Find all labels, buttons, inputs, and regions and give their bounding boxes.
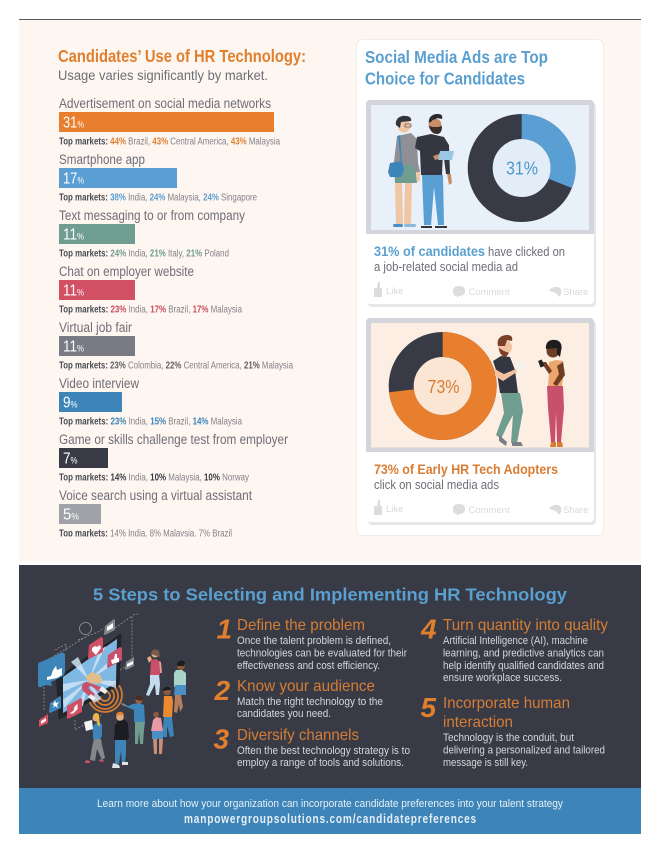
step 5: incorporate human interaction: interaction <box>443 714 513 731</box>
social actions row: Comment <box>468 505 510 516</box>
step 4: turn quantity into quality: learning, and predictive analytics can <box>443 648 604 660</box>
step 5: incorporate human interaction: Incorporate human <box>443 695 570 712</box>
icon: like bubble <box>38 653 65 687</box>
step 2: know your audience: candidates you need. <box>237 708 331 720</box>
person: woman in pink <box>151 712 163 754</box>
step 4: turn quantity into quality: Artificial Intelligence (AI), machine <box>443 635 588 647</box>
bar row: smartphone app: Top markets: 38% India, 24% Malaysia, 24% Singapore <box>59 192 257 204</box>
caption: 31% of candidates: have clicked on <box>488 245 565 259</box>
bar row: chat: 11% <box>63 282 84 300</box>
bar row: voice search: Voice search using a virtual assistant <box>59 488 252 503</box>
icon: tablet with rays <box>56 633 122 720</box>
bar row: chat: Top markets: 23% India, 17% Brazil, 17% Malaysia <box>59 304 242 316</box>
panel: candidates' use of HR technology <box>19 20 641 562</box>
step 2: know your audience: Match the right technology to the <box>237 696 383 708</box>
bar row: social media: Advertisement on social media networks <box>59 96 271 111</box>
bar row: virtual job fair: Virtual job fair <box>59 320 132 335</box>
bar row: chat <box>59 264 242 316</box>
bar row: game or skills challenge: Game or skills challenge test from employer <box>59 432 288 447</box>
icon: hand holding magnet <box>82 672 108 701</box>
step 5: incorporate human interaction <box>420 692 605 769</box>
bar row: voice search <box>59 488 252 540</box>
bar row: social media <box>59 96 280 148</box>
step 4: turn quantity into quality <box>420 614 608 684</box>
icon: pink thumb card <box>67 698 82 719</box>
step 4: turn quantity into quality: ensure workplace success. <box>443 672 562 684</box>
person: man in black <box>112 712 129 768</box>
step 3: diversify channels: employ a range of tools and solutions. <box>237 757 404 769</box>
step 2: know your audience: Know your audience <box>237 678 375 695</box>
illustration: two people with phones <box>493 335 565 447</box>
bar row: video interview <box>59 376 242 428</box>
social actions row: Like <box>386 286 403 297</box>
donut chart: 73%: 73% <box>428 376 460 397</box>
illustration: people around tablet with magnet <box>38 614 186 768</box>
step 3: diversify channels: 3 <box>214 724 230 754</box>
bar row: voice search: Top markets: 14% India, 8% Malaysia, 7% Brazil <box>59 528 232 540</box>
subheading: Usage varies significantly by market. <box>58 68 268 83</box>
bar row: social media: Top markets: 44% Brazil, 43% Central America, 43% Malaysia <box>59 136 280 148</box>
icon: star card <box>49 696 61 713</box>
icon: thumb card <box>107 647 122 668</box>
step 1: define the problem: technologies can be evaluated for their <box>237 648 407 660</box>
bar row: voice search: 5% <box>63 506 79 524</box>
social actions row: Like <box>386 504 403 515</box>
step 5: incorporate human interaction: Technology is the conduit, but <box>443 732 574 744</box>
bar row: chat: Chat on employer website <box>59 264 194 279</box>
social actions row: Share <box>563 287 588 298</box>
person: man in orange <box>162 687 174 737</box>
icon: heart card <box>88 637 103 659</box>
bar row: text messaging: 11% <box>63 226 84 244</box>
card: 73% of early adopters <box>366 318 596 525</box>
bar row: smartphone app: Smartphone app <box>59 152 145 167</box>
heading: candidates' use: Candidates’ Use of HR Technology: <box>58 46 306 66</box>
step 2: know your audience: 2 <box>214 675 230 706</box>
step 1: define the problem <box>216 614 407 672</box>
step 3: diversify channels <box>214 724 410 769</box>
panel: 5 steps <box>19 565 641 788</box>
bar row: game or skills challenge: Top markets: 14% India, 10% Malaysia, 10% Norway <box>59 472 249 484</box>
step 1: define the problem: Define the problem <box>237 617 365 634</box>
step 4: turn quantity into quality: 4 <box>420 614 437 644</box>
step 5: incorporate human interaction: delivering a personalized and tailored <box>443 744 605 756</box>
step 2: know your audience <box>214 675 383 720</box>
step 1: define the problem: effectiveness and cost efficiency. <box>237 660 380 672</box>
bar row: text messaging: Text messaging to or from company <box>59 208 245 223</box>
bar row: video interview: Top markets: 23% India, 15% Brazil, 14% Malaysia <box>59 416 242 428</box>
bar row: smartphone app <box>59 152 257 204</box>
bar row: smartphone app: 17% <box>63 170 84 188</box>
step 4: turn quantity into quality: help identify qualified candidates and <box>443 660 604 672</box>
bar row: text messaging <box>59 208 245 260</box>
icon: small pink card <box>39 714 48 727</box>
caption: 31% of candidates <box>374 243 565 274</box>
social actions row <box>374 282 588 298</box>
person: woman with laptop <box>84 713 105 763</box>
step 3: diversify channels: Diversify channels <box>237 727 359 744</box>
donut chart: 31%: 31% <box>506 158 538 178</box>
social actions row: Share <box>563 505 588 516</box>
icon: orange target rings <box>88 678 122 712</box>
panel: social media ads <box>356 40 604 536</box>
step 1: define the problem: 1 <box>216 614 232 644</box>
caption: 73% of early adopters: 73% of Early HR Tech Adopters <box>374 461 558 477</box>
caption: 31% of candidates: a job-related social media ad <box>374 260 518 274</box>
icon: chat card top <box>104 619 115 635</box>
bar row: virtual job fair: Top markets: 23% Colombia, 22% Central America, 21% Malaysia <box>59 360 293 372</box>
bar row: social media: 31% <box>63 114 84 132</box>
bar row: text messaging: Top markets: 24% India, 21% Italy, 21% Poland <box>59 248 229 260</box>
caption: 73% of early adopters <box>374 461 558 492</box>
illustration: two people with tablet <box>388 114 454 228</box>
step 5: incorporate human interaction: 5 <box>420 692 436 723</box>
donut chart: 31% <box>480 126 563 210</box>
step 1: define the problem: Once the talent problem is defined, <box>237 635 391 647</box>
banner text: Learn more about how your organization can incorporate candidate preferences into your talent strategy <box>97 798 563 810</box>
donut chart: 73% <box>401 344 484 428</box>
bar row: video interview: Video interview <box>59 376 139 391</box>
bar row: virtual job fair <box>59 320 293 372</box>
bar row: game or skills challenge: 7% <box>63 450 78 468</box>
bar row: virtual job fair: 11% <box>63 338 84 356</box>
heading: 5 steps: 5 Steps to Selecting and Implementing HR Technology <box>93 584 567 604</box>
heading: social media ads <box>365 47 548 88</box>
caption: 73% of early adopters: click on social media ads <box>374 478 499 492</box>
step 3: diversify channels: Often the best technology strategy is to <box>237 745 410 757</box>
bar row: game or skills challenge <box>59 432 288 484</box>
icon: chat card right <box>125 657 134 670</box>
caption: 31% of candidates: 31% of candidates <box>374 243 485 259</box>
step 4: turn quantity into quality: Turn quantity into quality <box>443 617 608 634</box>
step 5: incorporate human interaction: message is still key. <box>443 757 528 769</box>
person: woman in teal <box>174 661 186 713</box>
heading: social media ads: Social Media Ads are Top <box>365 47 548 67</box>
icon: globe <box>80 622 92 634</box>
card: 31% of candidates <box>366 100 596 307</box>
social actions row: Comment <box>468 287 510 298</box>
banner link: manpowergroupsolutions.com/candidatepreferences <box>184 812 477 826</box>
social actions row <box>374 500 588 516</box>
bar row: video interview: 9% <box>63 394 78 412</box>
heading: social media ads: Choice for Candidates <box>365 68 525 88</box>
banner: call to action <box>19 788 641 834</box>
person: pointing man <box>121 696 145 744</box>
person: woman on phone <box>146 649 162 696</box>
